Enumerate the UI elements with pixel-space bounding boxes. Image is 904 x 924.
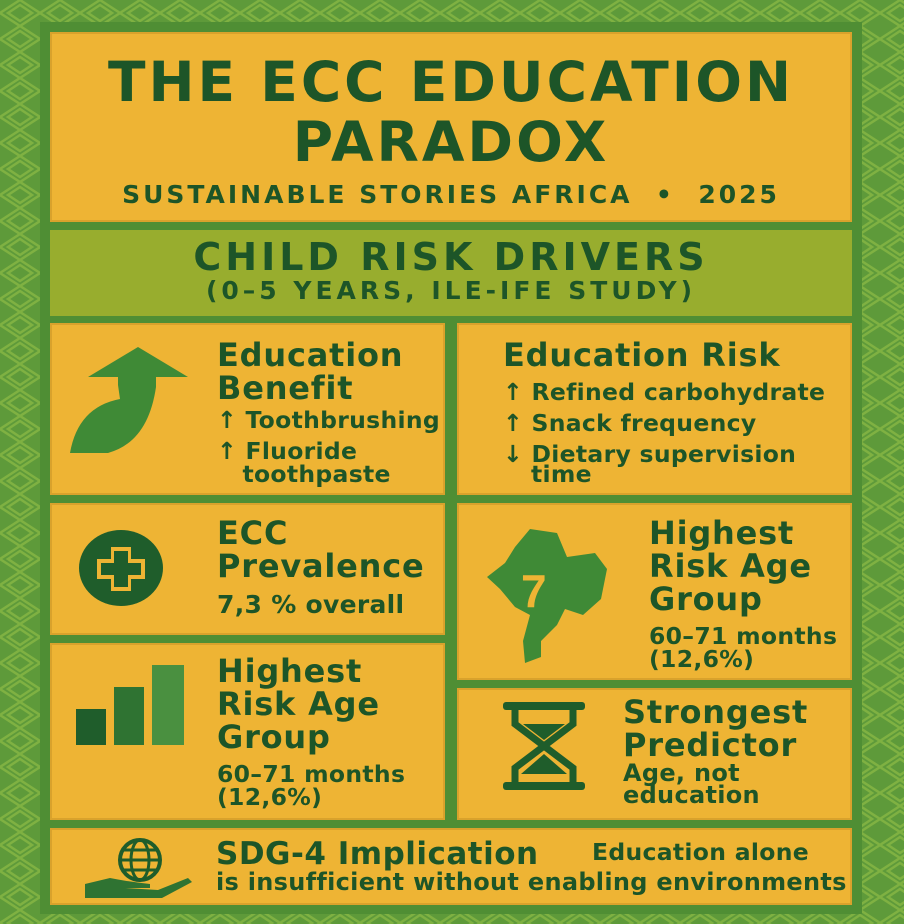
panel: ECC prevalence: Prevalence — [217, 547, 425, 585]
panel: ECC prevalence: ECC — [217, 514, 288, 552]
title panel: PARADOX — [293, 110, 609, 174]
panel: education risk: ↑ Refined carbohydrate — [503, 378, 825, 406]
panel: highest risk age group (map): (12,6%) — [649, 645, 754, 673]
title panel: SUSTAINABLE STORIES AFRICA • 2025 — [122, 180, 780, 209]
panel: highest risk age group (map): Group — [649, 580, 763, 618]
panel: education benefit: toothpaste — [242, 460, 391, 488]
section band: child risk drivers — [50, 230, 852, 316]
panel: ECC prevalence — [50, 503, 445, 635]
panel: education benefit: ↑ Fluoride — [217, 437, 357, 465]
section band: child risk drivers: CHILD RISK DRIVERS — [193, 235, 709, 279]
panel: highest risk age group (bars): Risk Age — [217, 685, 380, 723]
panel: highest risk age group (bars) — [50, 643, 445, 820]
panel: SDG-4 implication — [50, 828, 852, 905]
icon: globe in hand — [85, 838, 192, 898]
panel: highest risk age group (bars): 60–71 months — [217, 760, 405, 788]
panel: strongest predictor: Strongest — [623, 693, 808, 731]
icon: hourglass — [503, 702, 585, 790]
panel: highest risk age group (map): Highest — [649, 514, 794, 552]
panel: highest risk age group (bars): Group — [217, 718, 331, 756]
section band: child risk drivers: (0–5 YEARS, ILE-IFE STUDY) — [206, 276, 696, 305]
panel: strongest predictor: Age, not — [623, 759, 740, 787]
panel: strongest predictor — [457, 688, 852, 820]
panel: education risk — [457, 323, 852, 495]
panel: strongest predictor: Predictor — [623, 726, 797, 764]
panel: education risk: time — [531, 460, 592, 488]
panel: education benefit: Benefit — [217, 369, 353, 407]
title panel — [50, 32, 852, 222]
panel: strongest predictor: education — [623, 781, 760, 809]
panel: education risk: ↑ Snack frequency — [503, 409, 756, 437]
panel: ECC prevalence: 7,3 % overall — [217, 590, 404, 619]
panel: SDG-4 implication: Education alone — [592, 838, 809, 866]
panel: highest risk age group (bars): Highest — [217, 652, 362, 690]
panel: education benefit: Education — [217, 336, 403, 374]
icon: bar chart — [76, 665, 184, 745]
panel: highest risk age group (map) — [457, 503, 852, 680]
title panel: THE ECC EDUCATION — [108, 50, 794, 114]
icon: map with 7 — [487, 529, 607, 663]
panel: SDG-4 implication: SDG-4 Implication — [216, 836, 539, 872]
panel: education risk: ↓ Dietary supervision — [503, 440, 796, 468]
panel: education benefit — [50, 323, 445, 495]
panel: education risk: Education Risk — [503, 336, 780, 374]
panel: highest risk age group (map): 60–71 months — [649, 622, 837, 650]
panel: highest risk age group (bars): (12,6%) — [217, 783, 322, 811]
icon: curved arrow — [70, 347, 188, 453]
panel: highest risk age group (map): Risk Age — [649, 547, 812, 585]
panel: SDG-4 implication: is insufficient without enabling environments — [216, 868, 847, 896]
icon: map with 7: 7 — [521, 565, 547, 617]
icon: plus circle — [79, 530, 163, 606]
panel: education benefit: ↑ Toothbrushing — [217, 406, 440, 434]
